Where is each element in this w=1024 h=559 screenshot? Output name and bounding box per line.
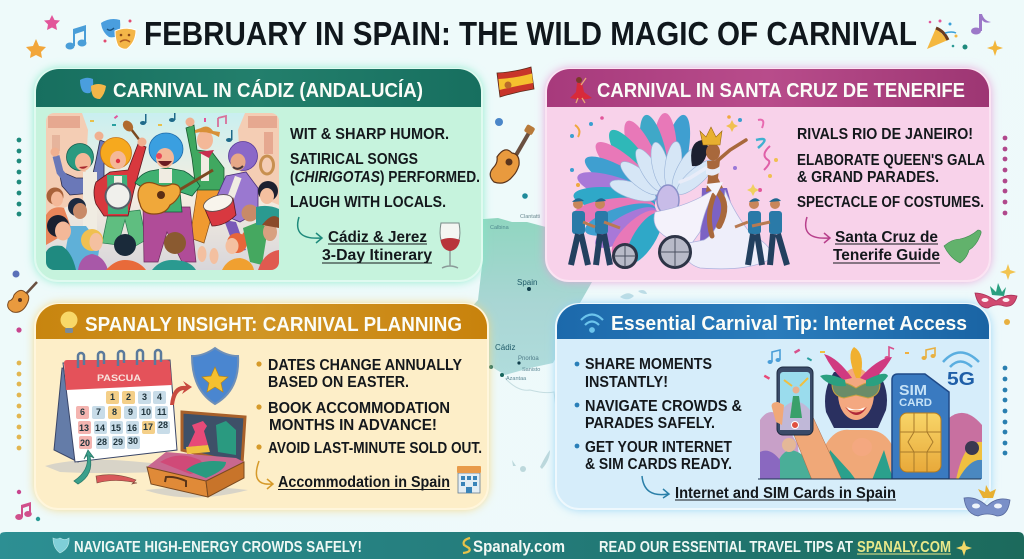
text: planning bullets: MONTHS IN ADVANCE! (269, 417, 437, 434)
icon: 5G signal: 5G (947, 368, 975, 389)
calendar dates: 2 (126, 392, 131, 402)
icon: shield (53, 538, 69, 553)
illustration: calendar (45, 350, 190, 484)
icon: maraca (131, 129, 140, 140)
woman (794, 347, 892, 478)
panel glow (35, 304, 488, 509)
calendar dates: 9 (128, 407, 133, 417)
icon: pink star (44, 15, 60, 30)
calendar dates (76, 391, 170, 449)
workers (571, 198, 787, 265)
icon: sim card (892, 374, 949, 479)
text: internet bullets: PARADES SAFELY. (585, 415, 715, 432)
fingers holding phone (772, 402, 784, 425)
icon: guitar (490, 124, 535, 183)
icon: sparkle (956, 540, 972, 556)
icon: blue music note (66, 25, 86, 50)
text: highlights: (CHIRIGOTAS) PERFORMED. (290, 169, 480, 186)
illustration: calendar: PASCUA (97, 373, 142, 383)
link (833, 229, 940, 264)
icon: sim card: CARD (899, 397, 932, 409)
calendar dates: 13 (79, 423, 89, 433)
footer call to action: SPANALY.COM (857, 539, 951, 556)
calendar dates: 20 (80, 438, 90, 448)
text: highlights: & GRAND PARADES. (797, 169, 939, 186)
arrow (298, 217, 322, 243)
calendar dates: 7 (96, 407, 101, 417)
confetti (570, 115, 778, 196)
text: highlights (797, 126, 985, 211)
calendar dates: 15 (111, 423, 121, 433)
link: Santa Cruz de (835, 229, 938, 246)
icon: sim card: SIM (899, 382, 927, 399)
gown (700, 188, 742, 243)
link (322, 229, 432, 264)
icon: wine glass (440, 223, 460, 268)
link: Internet and SIM Cards in Spain (675, 485, 896, 502)
panel card (546, 69, 990, 281)
text: planning bullets: BOOK ACCOMMODATION (268, 400, 450, 417)
arrow: to shield (170, 381, 192, 405)
calendar dates: 11 (157, 407, 167, 417)
calendar dates: 28 (97, 437, 107, 447)
text: internet bullets: SHARE MOMENTS (585, 356, 712, 373)
performer: blue wig guitarist (143, 207, 196, 262)
icon: guitar (176, 170, 213, 192)
text: highlights: ELABORATE QUEEN'S GALA (797, 152, 985, 169)
feathers (572, 113, 696, 268)
crowd background (760, 412, 982, 480)
performer: green wig (56, 140, 105, 195)
panel: carnival in santa cruz de tenerife (546, 69, 990, 281)
map of Spain: Pnorloa (518, 356, 539, 362)
arrow: date up (74, 450, 94, 484)
arrow (256, 461, 273, 489)
calendar dates: 8 (112, 407, 117, 417)
panel glow (35, 69, 482, 281)
link: Cádiz & Jerez (328, 229, 427, 246)
map of Spain: Clantatti (520, 214, 540, 220)
illustration: carnival queen float (570, 113, 787, 269)
icon: header masks (80, 78, 106, 99)
title: FEBRUARY IN SPAIN: THE WILD MAGIC OF CARNIVAL (144, 15, 917, 52)
calendar dates: 1 (110, 392, 115, 402)
calendar dates: 28 (158, 420, 168, 430)
icon: blue mask (964, 485, 1010, 516)
crowd (46, 207, 72, 245)
icon: spanish flag (497, 67, 534, 97)
map of Spain: Cádiz (495, 343, 515, 352)
map of Spain: Spain (517, 278, 537, 287)
panel card (556, 304, 990, 509)
panel header (36, 304, 487, 339)
icon: purple note (971, 14, 991, 34)
heading: CARNIVAL IN SANTA CRUZ DE TENERIFE (597, 79, 965, 102)
panel: carnival in cadiz (35, 69, 482, 281)
icon: shield (192, 348, 238, 404)
confetti and notes (764, 347, 936, 380)
panel header (36, 69, 481, 107)
calendar dates: 4 (157, 392, 162, 402)
icon: tenerife island (944, 230, 981, 263)
panel header (547, 69, 989, 107)
queen (680, 127, 746, 236)
illustration: woman with phone and sim card (760, 347, 982, 480)
text: highlights: LAUGH WITH LOCALS. (290, 194, 446, 211)
icon: pink music note (15, 502, 32, 520)
text: planning bullets: DATES CHANGE ANNUALLY (268, 357, 462, 374)
panel glow (556, 304, 990, 509)
map of Spain (460, 214, 647, 472)
panel card (35, 69, 482, 281)
brand logo: Spanaly.com (473, 537, 565, 556)
text: highlights: SATIRICAL SONGS (290, 151, 418, 168)
floor line (758, 478, 981, 480)
raised arm (794, 418, 842, 478)
text: planning bullets: BASED ON EASTER. (268, 374, 409, 391)
icon: gold star (26, 39, 46, 58)
text: highlights (290, 126, 480, 211)
icon: hotel (457, 466, 481, 493)
calendar dates: 29 (113, 437, 123, 447)
icon: banjo (106, 184, 130, 208)
heading: SPANALY INSIGHT: CARNIVAL PLANNING (85, 313, 462, 336)
calendar dates: 10 (141, 407, 151, 417)
text: internet bullets: & SIM CARDS READY. (585, 456, 732, 473)
link: Accommodation in Spain (278, 474, 450, 491)
footer call to action: READ OUR ESSENTIAL TRAVEL TIPS AT (599, 539, 853, 556)
footer message: NAVIGATE HIGH-ENERGY CROWDS SAFELY! (74, 539, 362, 556)
icon: party popper (927, 20, 958, 49)
calendar dates: 17 (143, 422, 153, 432)
arrow (806, 217, 830, 243)
wheels (614, 236, 690, 268)
icon: suitcase (145, 412, 248, 498)
panel: internet access tip (556, 304, 990, 509)
calendar rings (78, 350, 161, 368)
map of Spain: Azantaa (506, 376, 527, 382)
text: internet bullets: GET YOUR INTERNET (585, 439, 732, 456)
text: internet bullets: INSTANTLY! (585, 374, 668, 391)
link: Tenerife Guide (833, 247, 940, 264)
icon: theatre masks (101, 19, 136, 49)
text: planning bullets (256, 357, 482, 457)
map of Spain: Sanisto (522, 367, 540, 373)
calendar dates: 6 (80, 407, 85, 417)
footer bar (0, 532, 1024, 559)
text: planning bullets: AVOID LAST-MINUTE SOLD OUT. (268, 440, 482, 457)
calendar dates: 14 (95, 423, 105, 433)
icon: smartphone (777, 367, 813, 435)
calendar dates: 3 (142, 392, 147, 402)
ribbon (96, 475, 137, 484)
panel: carnival planning (35, 304, 488, 509)
heading: Essential Carnival Tip: Internet Access (611, 312, 967, 335)
panel glow (546, 69, 990, 281)
text: highlights: SPECTACLE OF COSTUMES. (797, 194, 984, 211)
music notes and confetti (140, 112, 232, 142)
inner silver feathers (608, 140, 719, 206)
map of Spain: Calbina (490, 225, 510, 231)
text: highlights: RIVALS RIO DE JANEIRO! (797, 126, 973, 143)
text: internet bullets (575, 356, 742, 473)
heading: CARNIVAL IN CÁDIZ (ANDALUCÍA) (113, 79, 423, 102)
decorative dots (12, 118, 1016, 521)
performer: hat man (192, 190, 220, 244)
text: highlights: WIT & SHARP HUMOR. (290, 126, 449, 143)
icon: red mask (975, 283, 1017, 308)
arrow (642, 476, 669, 498)
panel header (557, 304, 989, 339)
icon: light bulb (60, 312, 78, 333)
illustration: street musicians (46, 112, 279, 270)
icon: small guitar (8, 282, 37, 312)
icon: drum (204, 198, 236, 226)
performer: orange wig (102, 210, 146, 248)
icon: tambourine (260, 156, 274, 174)
headdress (824, 354, 852, 380)
panel card (35, 304, 488, 509)
performer: purple wig (216, 172, 258, 222)
icon: 5G signal (943, 352, 979, 389)
text: internet bullets: NAVIGATE CROWDS & (585, 398, 742, 415)
link: 3-Day Itinerary (322, 247, 432, 264)
calendar dates: 16 (127, 423, 137, 433)
map of Spain: Cádiz (465, 369, 485, 378)
icon: wifi (581, 314, 603, 332)
calendar dates: 30 (128, 436, 138, 446)
icon: dancer (570, 77, 592, 103)
